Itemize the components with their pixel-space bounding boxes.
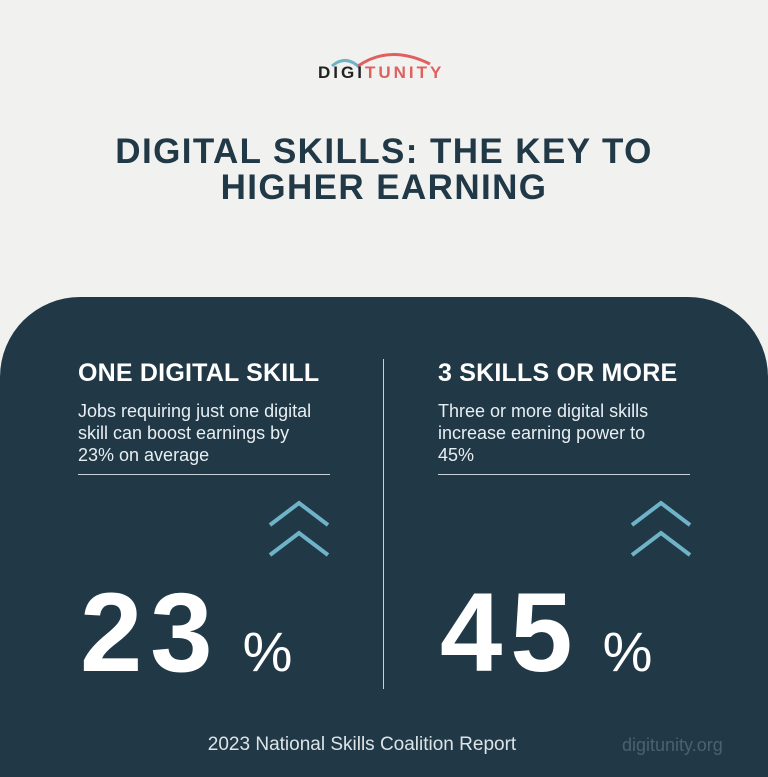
panel	[0, 297, 768, 777]
icon: chevrons	[268, 500, 330, 556]
title: DIGITAL SKILLS: THE KEY TO	[115, 132, 653, 171]
website: digitunity.org	[622, 735, 723, 755]
heading: 3 SKILLS OR MORE	[438, 359, 677, 387]
description: Three or more digital skills increase earning power to 45%	[438, 401, 648, 465]
logo: DIGITUNITY	[318, 63, 444, 82]
heading: ONE DIGITAL SKILL	[78, 359, 319, 387]
title	[115, 132, 653, 207]
divider	[383, 359, 384, 689]
source: 2023 National Skills Coalition Report	[208, 734, 516, 755]
column: three skills	[438, 359, 692, 695]
icon: chevrons	[630, 500, 692, 556]
title: HIGHER EARNING	[221, 168, 547, 207]
big number: 23 %	[80, 570, 292, 695]
logo	[318, 53, 444, 82]
column: one skill	[78, 359, 330, 695]
big number: 45 %	[440, 570, 652, 695]
description: Jobs requiring just one digital skill can boost earnings by 23% on average	[78, 401, 311, 465]
